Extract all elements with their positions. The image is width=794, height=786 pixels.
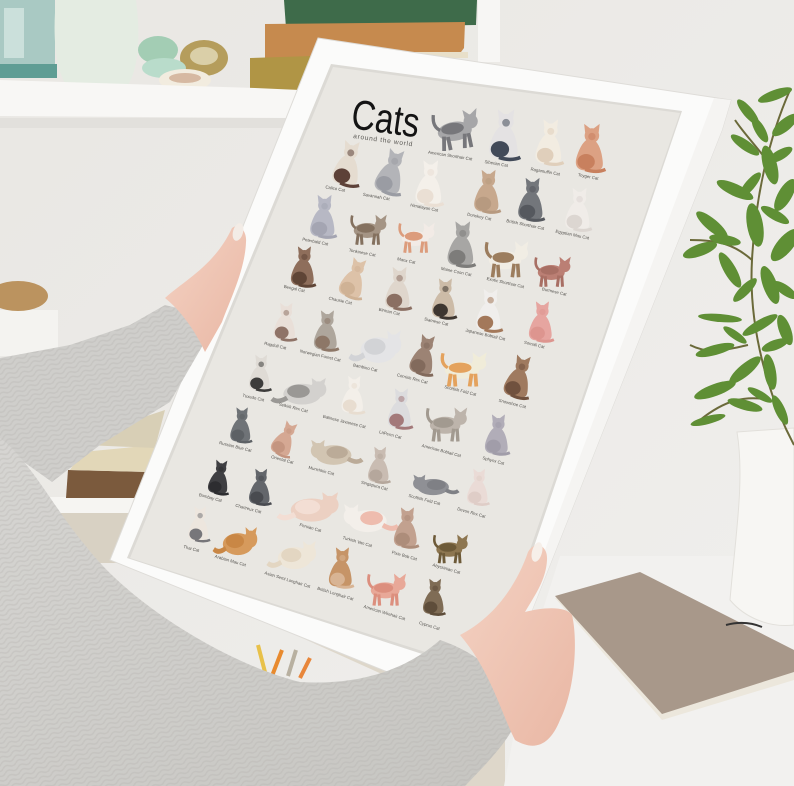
cat: Siberian [484,109,520,168]
cat: Egyptian Mau [555,188,592,241]
cat: Exotic Shorthair: Exotic Shorthair Cat [486,276,525,289]
cat: Oriental [269,418,301,465]
cat: Ragdoll [264,303,297,351]
cat: American Shorthair: American Shorthair Cat [428,150,473,162]
cat: Siamese: Siamese Cat [424,316,450,327]
cat: Donskoy: Donskoy Cat [467,212,493,222]
cat: Asian Semi-Longhair [264,541,316,589]
cat: Cyprus [418,579,445,631]
cat: Arabian Mau [214,527,257,568]
lower shelf with books [40,410,165,563]
cat: Manx [397,223,435,265]
cat: Ragdoll: Ragdoll Cat [264,341,288,351]
cat: LaPerm [379,388,413,440]
cat: Siamese [424,278,457,327]
cat: Peterbald [302,195,337,247]
cat: Tonkinese [348,215,387,258]
cat: Birman: Birman Cat [378,307,401,317]
wooden shelf unit and jars, top left [0,0,500,128]
cat: Chartreux [235,469,271,515]
floor area under frame [130,560,505,786]
cat: American Bobtail: American Bobtail Cat [421,443,462,458]
plant [681,84,794,445]
poster [130,67,680,672]
cat: British Shorthair [506,178,545,231]
cat: Arabian Mau: Arabian Mau Cat [214,554,247,568]
cat: LaPerm: LaPerm Cat [379,429,403,440]
cat: Oriental: Oriental Cat [271,454,295,465]
cat: Scottish Fold orange [442,352,487,397]
knit sleeve: raised arm [0,305,203,482]
cat: Manx: Manx Cat [397,256,417,265]
cat: Munchkin: Munchkin Cat [308,465,335,477]
cat: American Shorthair [428,108,482,162]
cat: British Shorthair: British Shorthair Cat [506,218,545,231]
cat: Scottish Fold grey [408,475,458,506]
cat: Bengal [283,246,316,293]
cat: Birman [378,267,412,317]
cat: Snowshoe: Snowshoe Cat [498,398,527,410]
cat: Norwegian Forest [299,310,342,363]
cat: American Bobtail [421,407,467,458]
desk [504,556,794,786]
cat: Chausie [328,255,371,306]
cat: Japanese Bobtail: Japanese Bobtail Cat [465,328,507,342]
cat: Donskoy [467,170,501,222]
tape rolls [138,36,228,91]
cat: British Longhair [317,547,355,602]
knit sweater body and lower sleeve [0,438,520,786]
cat: Ragdoll: Ragamuffin Cat [530,166,561,177]
cat: Turkish Van: Turkish Van Cat [342,535,373,548]
shelf board [0,80,300,118]
cat: Selkirk Rex [272,378,326,414]
cat: Singapura: Singapura Cat [360,480,389,492]
cat: Somali: Somali Cat [524,340,546,350]
cat: Burmese [536,257,571,297]
cat: Balinese Javanese: Balinese Javanese Cat [322,414,367,429]
cat: Abyssinian: Abyssinian Cat [432,562,462,575]
cat: Devon Rex [457,469,489,519]
cat: Peterbald: Peterbald Cat [302,237,329,247]
cat: Balinese Javanese [322,376,367,429]
pencils [258,645,310,678]
title: Cats [349,90,423,146]
right hand with fingernail [460,541,575,746]
cat: Siberian: Siberian Cat [484,159,509,168]
cat: Calico [325,139,365,193]
cat: American Wirehair [363,574,407,622]
cat: Devon Rex: Devon Rex Cat [457,506,487,519]
cat: Tonkinese: Tonkinese Cat [348,247,377,258]
cat: Himalayan [410,160,444,213]
cat: Abyssinian [432,534,468,575]
cat: Scottish Fold grey: Scottish Fold Cat [408,493,442,506]
white picture frame [110,38,731,690]
stack of books [250,0,477,90]
glass jar [0,0,57,78]
cat: Tuxedo [242,355,271,403]
cat: Asian Semi-Longhair: Asian Semi Longhair Cat [264,570,312,589]
cat: Bengal: Bengal Cat [283,284,306,293]
cat: Chausie: Chausie Cat [328,296,353,306]
cat: Sphynx [482,414,510,466]
cat: Maine Coon [441,221,476,277]
cat: Maine Coon: Maine Coon Cat [441,266,473,277]
cat: Cornish Rex [396,333,440,385]
cat: Norwegian Forest: Norwegian Forest Cat [299,348,342,363]
left hand with fingernail [165,222,246,352]
cat: Burmese: Burmese Cat [542,286,568,297]
cat: Cyprus: Cyprus Cat [418,620,441,631]
cat: British Longhair: British Longhair Cat [317,586,355,602]
notebook [555,572,794,720]
cat: Exotic Shorthair [486,241,528,289]
cat: Bombay [198,459,231,503]
cat: Himalayan: Himalayan Cat [410,202,439,213]
cat: Selkirk Rex: Selkirk Rex Cat [278,402,309,414]
cat: Russian Blue: Russian Blue Cat [219,440,253,453]
cat: Japanese Bobtail [465,289,507,342]
cat: Sphynx: Sphynx Cat [482,455,506,466]
cat: Chartreux: Chartreux Cat [235,503,263,515]
ribbed vase [55,0,138,85]
cork lidded jar [0,281,58,356]
cat: Persian: Persian Cat [299,522,323,533]
cat: Pixie Bob: Pixie Bob Cat [391,550,418,562]
cat: Scottish Fold orange: Scottish Fold Cat [444,384,478,397]
cat: Bambino: Bambino Cat [353,362,379,373]
cat: Bambino [350,330,401,373]
frame inner bevel [127,64,682,676]
cat: Toyger: Toyger Cat [578,172,600,181]
cat: Toyger [576,124,605,181]
cat: Calico: Calico Cat [325,184,346,193]
cat: American Wirehair: American Wirehair Cat [363,604,407,622]
cat: Thai [183,506,210,553]
cat: Persian [278,492,339,533]
cat: Ragdoll [530,119,564,177]
white plant pot [730,428,794,626]
subtitle: around the world [353,133,413,148]
cat: Savannah [362,146,410,201]
cat: Bombay: Bombay Cat [198,492,223,503]
frame side shading [518,98,731,628]
cat: Munchkin [308,440,362,477]
cat: Russian Blue [219,407,253,453]
cat: Snowshoe [498,353,536,410]
cat: Savannah: Savannah Cat [362,192,391,201]
cat: Egyptian Mau: Egyptian Mau Cat [555,229,590,241]
cat: Pixie Bob [391,507,419,562]
cat: Thai: Thai Cat [183,544,201,553]
cat: Turkish Van [342,504,398,548]
cat: Cornish Rex: Cornish Rex Cat [396,372,429,385]
cat: Tuxedo: Tuxedo Cat [242,393,265,403]
cat: Somali [524,301,554,350]
cat: Singapura [360,447,390,492]
